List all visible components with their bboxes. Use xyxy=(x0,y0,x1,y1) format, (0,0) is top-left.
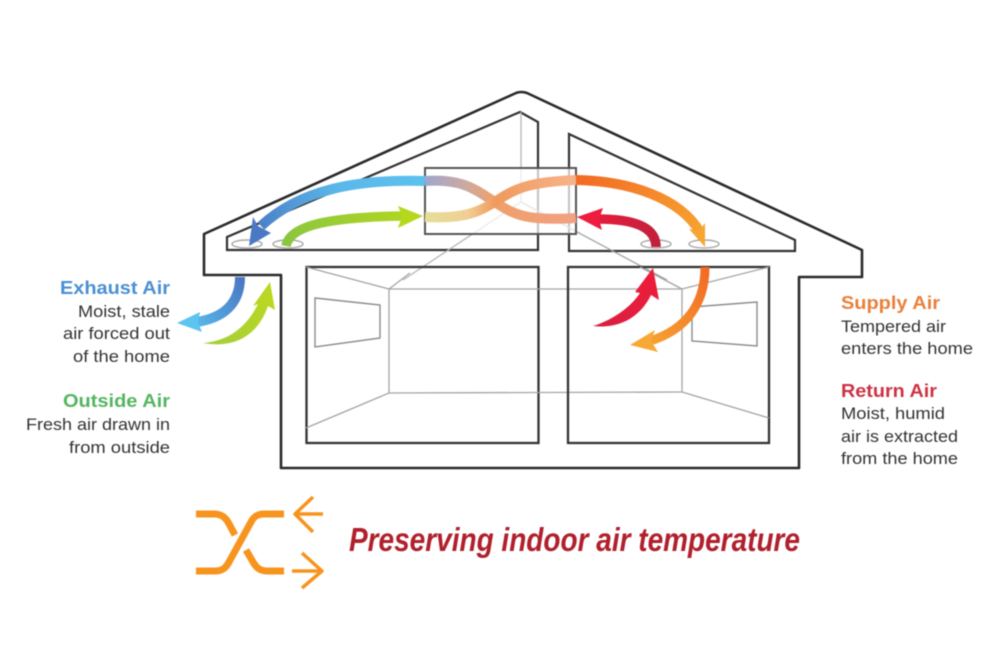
label: return air: air is extracted xyxy=(841,428,958,446)
icon: crossing air streams xyxy=(196,497,323,588)
arrow: exhaust leaving home xyxy=(177,277,240,332)
arrow: outside air entering xyxy=(203,282,275,344)
label: exhaust air: of the home xyxy=(73,348,170,366)
label: supply air: Tempered air xyxy=(841,318,947,336)
label: outside air: from outside xyxy=(69,439,170,457)
label: supply air: enters the home xyxy=(841,340,973,358)
label: return air: from the home xyxy=(841,450,958,468)
label: supply air: Supply Air xyxy=(841,293,940,313)
strand: outside to supply crossing xyxy=(425,180,576,217)
arrow: supply in attic xyxy=(576,180,705,247)
label: outside air xyxy=(26,391,170,457)
left window xyxy=(315,298,380,347)
right room xyxy=(568,267,769,443)
label: exhaust air xyxy=(60,278,170,366)
arrow: supply air into room xyxy=(630,267,705,352)
label: outside air: Outside Air xyxy=(63,391,170,411)
right window xyxy=(692,302,757,346)
vent ellipses xyxy=(232,240,719,248)
label: exhaust air: Moist, stale xyxy=(78,303,170,321)
house outline xyxy=(204,92,862,468)
label: return air: Moist, humid xyxy=(841,405,945,423)
label: outside air: Fresh air drawn in xyxy=(26,416,170,434)
heat exchanger box xyxy=(425,168,576,234)
label: return air xyxy=(841,381,958,468)
label: supply air xyxy=(841,293,973,358)
arrow: return air from room xyxy=(593,268,659,326)
arrow: outside air in attic xyxy=(286,206,423,246)
strand: exhaust to return crossing xyxy=(425,181,576,219)
left room xyxy=(306,112,682,443)
label: exhaust air: air forced out xyxy=(63,325,170,343)
label: return air: Return Air xyxy=(841,381,937,401)
left attic xyxy=(227,112,538,250)
arrow: exhaust in attic xyxy=(249,181,425,246)
right attic xyxy=(569,134,795,251)
arrow: return in attic xyxy=(577,208,656,247)
label: exhaust air: Exhaust Air xyxy=(60,278,170,298)
title: preserving indoor air temperature: Preserving indoor air temperature xyxy=(349,521,800,558)
